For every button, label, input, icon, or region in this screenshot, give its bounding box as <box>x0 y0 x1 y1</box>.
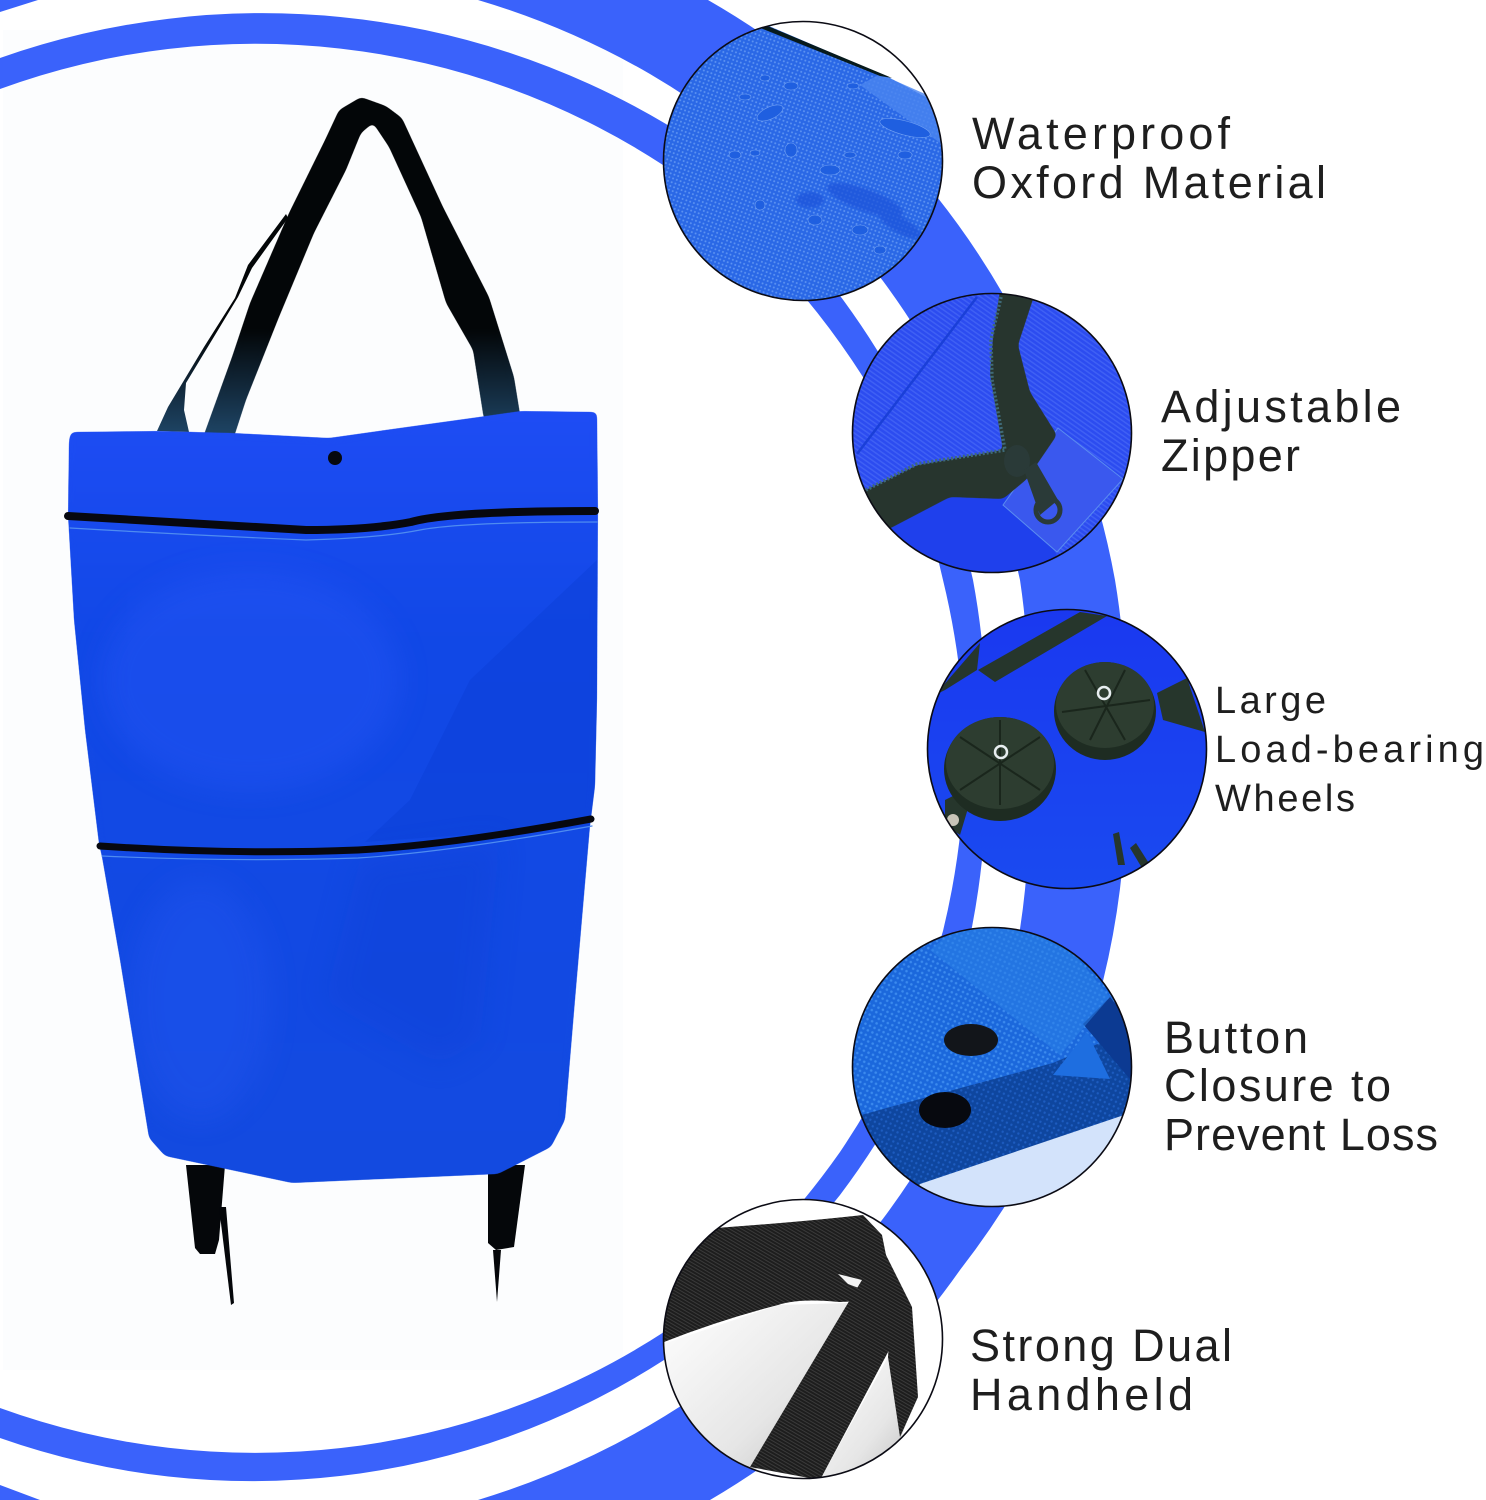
label: waterproof material <box>972 108 1326 208</box>
rivet <box>947 814 959 826</box>
label: load-bearing wheels: Wheels <box>1215 778 1355 820</box>
diagonal webbing strap <box>750 1247 912 1480</box>
outer blue ring <box>0 0 1126 1500</box>
inner blue ring <box>0 13 986 1481</box>
left lower strap <box>186 1165 234 1305</box>
back handle strap <box>157 214 288 432</box>
upper zipper <box>68 511 597 540</box>
lower snap <box>919 1092 971 1128</box>
wheel right <box>1054 662 1156 760</box>
pale surface <box>919 1116 1122 1206</box>
water droplets <box>729 75 932 254</box>
product: foldable trolley bag <box>68 97 598 1305</box>
label: dual handheld: Strong Dual <box>970 1320 1232 1371</box>
circle outline <box>852 294 1132 572</box>
detail circle: wheels <box>925 605 1210 890</box>
zipper pull <box>1004 445 1060 522</box>
fabric crease <box>857 297 977 454</box>
bag shading <box>128 560 597 825</box>
label: button closure <box>1164 1012 1438 1160</box>
lower zipper <box>100 819 592 860</box>
small white gap <box>838 1274 862 1288</box>
detail circle: zipper <box>850 290 1135 575</box>
label: waterproof material: Oxford Material <box>972 157 1326 208</box>
detail circle: dual handle <box>660 1195 950 1485</box>
label: dual handheld <box>970 1320 1232 1420</box>
label: load-bearing wheels: Large <box>1215 680 1326 722</box>
dark lower fabric <box>862 1043 1130 1185</box>
fold triangle <box>1053 1032 1110 1079</box>
circle outline <box>664 1200 942 1478</box>
detail circle: waterproof fabric <box>660 20 950 310</box>
snap button <box>944 1024 998 1056</box>
label: adjustable zipper: Adjustable <box>1161 381 1401 432</box>
label: adjustable zipper <box>1161 381 1401 481</box>
snap button <box>328 451 342 465</box>
zipper tape <box>856 290 1057 530</box>
detail circle: button closure <box>850 925 1135 1210</box>
bag body <box>68 411 598 1183</box>
label: button closure: Button <box>1164 1012 1308 1063</box>
circle outline <box>928 610 1206 888</box>
circle outline <box>852 928 1132 1206</box>
label: dual handheld: Handheld <box>970 1369 1193 1420</box>
label: button closure: Closure to <box>1164 1060 1391 1111</box>
label: load-bearing wheels: Load-bearing <box>1215 729 1484 771</box>
zipper tab <box>1003 428 1123 552</box>
label: waterproof material: Waterproof <box>972 108 1230 159</box>
wheel left <box>944 717 1056 821</box>
label: load-bearing wheels <box>1215 680 1484 820</box>
right webbing piece <box>888 1300 918 1437</box>
zipper teeth <box>866 297 1005 490</box>
front handle strap <box>202 97 521 440</box>
strap pieces <box>935 612 1205 868</box>
label: button closure: Prevent Loss <box>1164 1109 1438 1160</box>
right lower strap <box>488 1165 525 1302</box>
top webbing band <box>660 1215 895 1345</box>
circle outline <box>664 22 942 300</box>
flap <box>930 925 1110 1055</box>
label: adjustable zipper: Zipper <box>1161 430 1300 481</box>
